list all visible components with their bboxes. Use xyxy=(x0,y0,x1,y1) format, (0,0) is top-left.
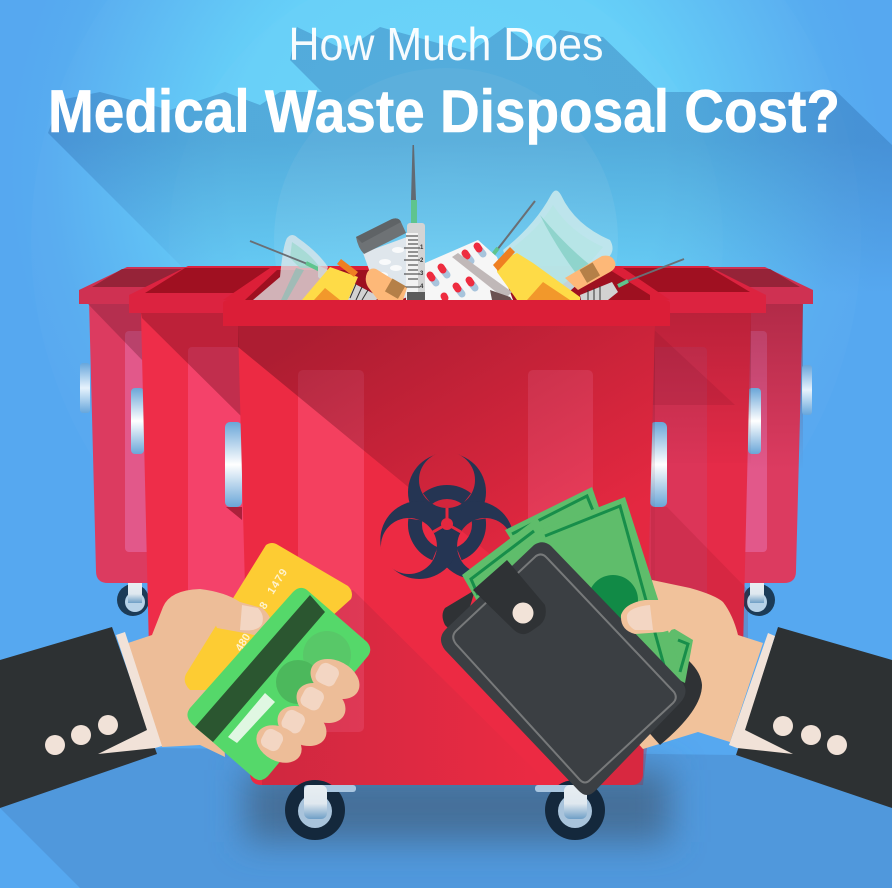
thumb xyxy=(621,600,690,634)
handle shadow xyxy=(651,507,748,640)
card long shadow xyxy=(262,590,540,785)
sleeve buttons xyxy=(773,716,847,755)
right bandage xyxy=(565,256,615,290)
title line 1: How Much Does xyxy=(288,18,604,70)
sleeve xyxy=(0,627,157,808)
right syringe xyxy=(580,259,684,300)
hand xyxy=(128,589,271,757)
fingers xyxy=(250,651,366,770)
biohazard symbol xyxy=(380,453,514,579)
far right bin xyxy=(642,267,813,616)
jar xyxy=(356,218,425,300)
bin opening xyxy=(223,266,670,300)
title xyxy=(48,18,840,145)
thumb xyxy=(200,590,271,635)
right bottle xyxy=(493,247,580,300)
stitching xyxy=(453,554,676,782)
floor with bin shadow xyxy=(0,748,892,888)
wheel xyxy=(743,583,775,616)
green card xyxy=(187,588,370,780)
hand xyxy=(600,580,763,749)
handle shadow xyxy=(226,507,242,520)
center bin xyxy=(223,300,670,785)
wallet corner shade xyxy=(600,720,650,785)
syringe: 2 xyxy=(420,258,424,264)
needle right flask xyxy=(497,201,535,250)
title long shadow xyxy=(48,27,892,300)
hub xyxy=(433,508,461,532)
handle xyxy=(80,363,90,413)
third banknote tip xyxy=(655,628,693,683)
clasp xyxy=(473,560,546,634)
syringe: 1 xyxy=(420,245,424,251)
front banknote xyxy=(540,497,688,683)
syringe: 3 xyxy=(420,271,424,277)
syringe: 4 xyxy=(420,284,424,290)
yellow card xyxy=(185,543,352,690)
bin body xyxy=(238,326,655,785)
right flask xyxy=(503,190,613,300)
left bandage xyxy=(366,268,407,300)
middle right bin xyxy=(600,266,766,650)
left flask xyxy=(253,235,328,300)
wheel xyxy=(117,583,149,616)
handle xyxy=(650,422,667,507)
yellow card: 8 xyxy=(257,600,271,612)
yellow card: 1479 xyxy=(265,566,291,597)
wallet front xyxy=(441,542,686,795)
handle xyxy=(225,422,242,507)
rim long shadow xyxy=(238,326,655,690)
blister pack xyxy=(425,240,513,300)
left panel xyxy=(298,370,364,732)
cuff xyxy=(729,633,793,754)
left bottle xyxy=(302,259,358,300)
right panel xyxy=(528,370,593,732)
title line 2: Medical Waste Disposal Cost? xyxy=(48,78,840,145)
center bin cast shadow xyxy=(650,326,735,405)
wallet back xyxy=(442,590,702,745)
crescents xyxy=(380,453,514,579)
syringe xyxy=(404,145,425,300)
back banknote xyxy=(505,487,605,570)
sleeve xyxy=(736,627,892,808)
middle left bin xyxy=(129,266,300,650)
waste pile xyxy=(223,145,684,300)
inner ring arcs xyxy=(415,492,479,554)
handle xyxy=(802,365,812,415)
right wheel xyxy=(535,780,605,840)
right hand with wallet xyxy=(441,487,892,808)
yellow card: 480 xyxy=(233,632,253,654)
left hand with cards xyxy=(0,543,370,808)
cuff xyxy=(98,632,162,754)
rim xyxy=(223,300,670,326)
middle banknote xyxy=(462,518,565,615)
left wheel xyxy=(285,780,356,840)
far left bin xyxy=(79,267,250,616)
sleeve buttons xyxy=(45,715,118,755)
left syringe xyxy=(250,241,380,300)
